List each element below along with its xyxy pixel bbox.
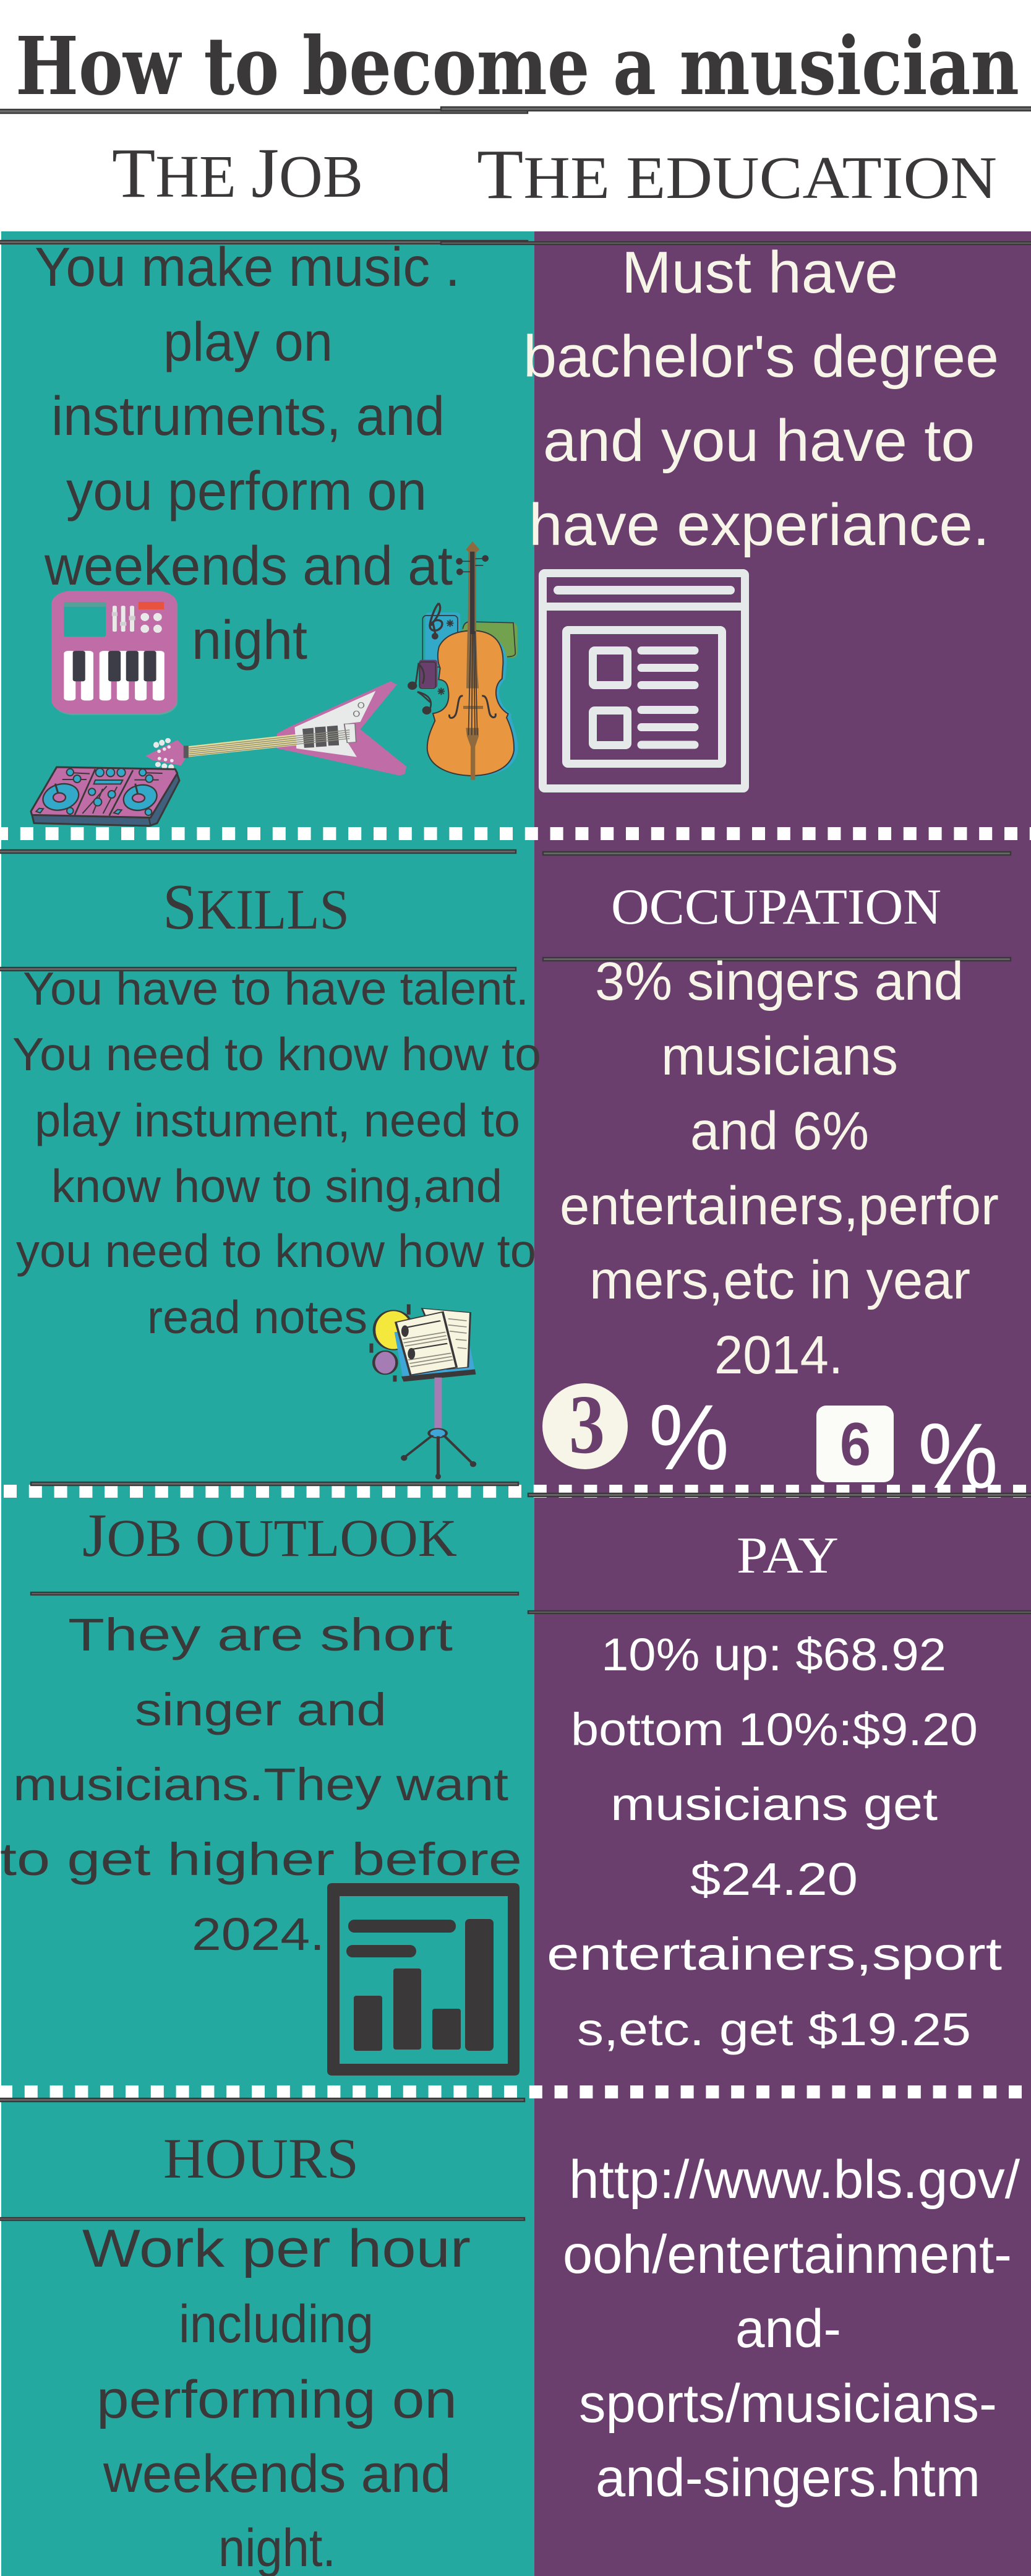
text block: job outlook: They are short (68, 1609, 453, 1660)
text block: job outlook (0, 1609, 522, 1960)
text block: pay: s,etc. get $19.25 (577, 2004, 971, 2055)
text block: the job: weekends and at (44, 535, 453, 596)
text block: skills: read notes (147, 1291, 367, 1343)
text block: hours: weekends and (103, 2444, 451, 2504)
text block: the education (523, 239, 999, 558)
text block: the education: Must have (622, 239, 898, 306)
stat: 3 percent (542, 1378, 729, 1489)
icon: document layout (542, 573, 745, 788)
text block: skills: play instument, need to (35, 1094, 520, 1146)
heading: skills: SKILLS (163, 870, 349, 943)
heading: occupation: OCCUPATION (611, 878, 941, 935)
text block: pay: musicians get (610, 1779, 938, 1830)
text block: the job (35, 236, 460, 671)
text block: pay (547, 1629, 1003, 2055)
text block: source link: sports/musicians- (579, 2374, 997, 2434)
heading: pay: PAY (737, 1527, 839, 1584)
text block: job outlook: singer and (135, 1684, 387, 1735)
stat: 3 percent: 3 (569, 1378, 605, 1471)
text block: the job: You make music . (35, 236, 460, 298)
text block: occupation: and 6% (690, 1101, 869, 1161)
text block: hours: performing on (96, 2370, 457, 2429)
stat: 6 percent: 6 (840, 1410, 871, 1478)
icon: flying V guitar (145, 681, 406, 776)
text block: skills: you need to know how to (16, 1225, 536, 1277)
text block: the job: instruments, and (51, 385, 445, 447)
text block: pay: 10% up: $68.92 (601, 1629, 946, 1680)
text block: the education: bachelor's degree (523, 324, 999, 390)
icon: bar chart (327, 1883, 520, 2076)
text block: the education: have experiance. (529, 492, 990, 558)
text block: pay: entertainers,sport (547, 1928, 1003, 1980)
icon: music stand with sheet music (371, 1304, 476, 1479)
text block: occupation: mers,etc in year (589, 1250, 970, 1310)
text block: job outlook: to get higher before (0, 1834, 522, 1885)
text block: source link: http://www.bls.gov/ (569, 2150, 1020, 2210)
text block: occupation: 2014. (714, 1325, 843, 1385)
heading: the job: THE JOB (112, 134, 363, 212)
text block: hours: including (179, 2295, 374, 2354)
text block: skills: know how to sing,and (51, 1160, 502, 1212)
heading: job outlook: JOB OUTLOOK (82, 1501, 457, 1569)
heading: hours: HOURS (163, 2127, 359, 2190)
text block: skills: You have to have talent. (23, 963, 529, 1015)
text block: the education: and you have to (543, 408, 975, 474)
heading: the education: THE EDUCATION (477, 135, 997, 213)
icon: cello and music notes (408, 541, 518, 780)
text block: pay: bottom 10%:$9.20 (571, 1704, 978, 1755)
text block: hours: Work per hour (82, 2219, 471, 2278)
text block: job outlook: musicians.They want (13, 1759, 509, 1810)
text block: occupation: musicians (661, 1026, 898, 1086)
text block: the job: you perform on (66, 460, 427, 522)
text block: occupation: 3% singers and (595, 951, 964, 1011)
icon: DJ turntable deck (31, 767, 179, 826)
text block: source link: and-singers.htm (596, 2448, 980, 2508)
text block: source link: ooh/entertainment- (563, 2225, 1012, 2285)
stat: 3 percent: % (649, 1385, 729, 1489)
stat: 6 percent (816, 1404, 998, 1508)
text block: occupation (560, 951, 999, 1385)
icon: keyboard (51, 591, 178, 715)
text block: skills: You need to know how to (12, 1028, 541, 1080)
text block: hours (82, 2219, 471, 2576)
text block: source link (563, 2150, 1020, 2508)
text block: source link: and- (735, 2299, 841, 2359)
stat: 6 percent: % (918, 1404, 998, 1508)
text block: pay: $24.20 (690, 1853, 858, 1905)
text block: skills (12, 963, 541, 1343)
text block: the job: play on (163, 311, 333, 372)
text block: job outlook: 2024. (192, 1908, 325, 1960)
text block: occupation: entertainers,perfor (560, 1176, 999, 1236)
text block: the job: night (192, 609, 307, 671)
